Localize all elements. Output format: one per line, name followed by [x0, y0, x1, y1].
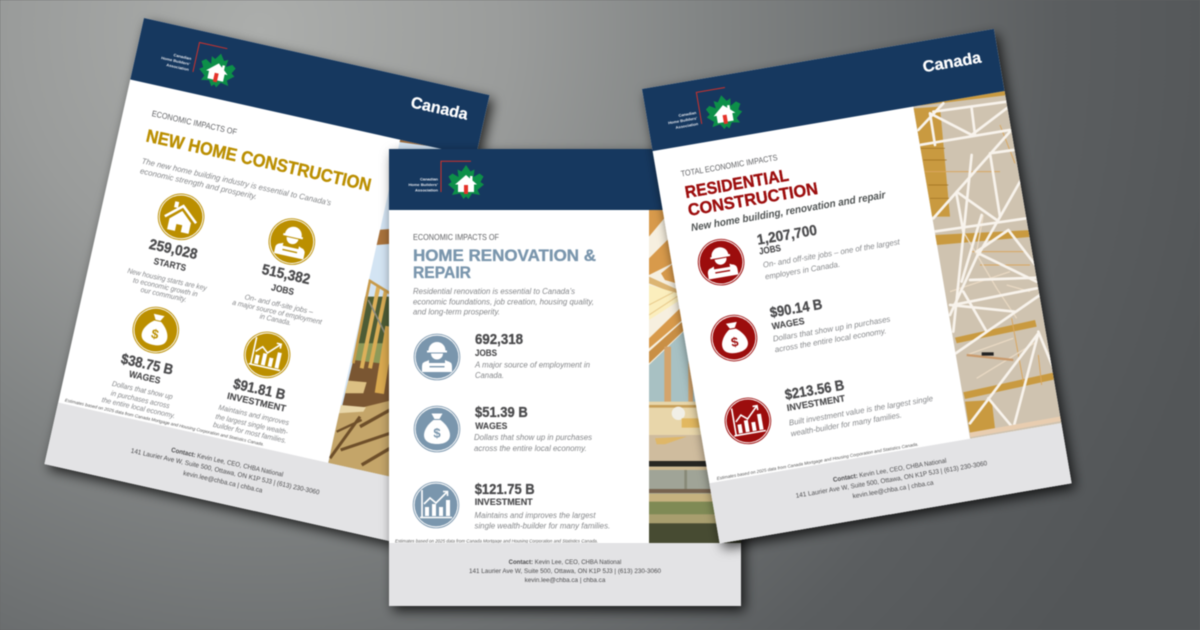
icon: chart	[722, 395, 774, 447]
icon: house	[154, 190, 208, 244]
logo: Association	[675, 122, 699, 130]
stat: starts: New housing starts are key	[127, 266, 209, 293]
stat: jobs	[695, 209, 903, 292]
heading	[680, 146, 819, 220]
photo: attic renovation	[648, 209, 742, 544]
stat: investment: Built investment value is the largest single	[788, 394, 934, 427]
logo	[158, 35, 240, 91]
icon: worker	[695, 236, 747, 288]
source note: Estimates based on 2025 data from Canada Mortgage and Housing Corporation and Statistics Canada.	[64, 398, 265, 447]
footer band	[709, 423, 1072, 543]
contact block: 141 Laurier Ave W, Suite 500, Ottawa, ON K1P 5J3 | (613) 230-3060	[795, 460, 988, 500]
stat: wages: WAGES	[475, 421, 507, 431]
stat: investment: $121.75 B	[475, 482, 535, 498]
photo: roof trusses	[913, 90, 1062, 439]
province label: Canada	[409, 94, 470, 124]
intro text: economic foundations, job creation, housing quality,	[413, 297, 594, 306]
stat: investment: $91.81 B	[232, 376, 287, 404]
source note: Estimates based on 2025 data from Canada Mortgage and Housing Corporation and Statistics Canada.	[395, 538, 598, 544]
stat: investment: INVESTMENT	[475, 497, 533, 507]
stat: wages: $90.14 B	[769, 297, 824, 322]
icon: worker	[414, 334, 460, 380]
contact block: Contact: Kevin Lee, CEO, CHBA National	[509, 559, 622, 566]
stat: investment: INVESTMENT	[786, 393, 846, 413]
contact block: kevin.lee@chba.ca | chba.ca	[852, 480, 934, 500]
stat: investment: single wealth-builder for many families.	[474, 522, 610, 530]
stat: jobs: JOBS	[758, 243, 782, 257]
panel: total residential construction flyer	[642, 10, 1184, 543]
stat: jobs: A major source of employment in	[474, 360, 591, 370]
icon: chart	[413, 482, 459, 528]
stat: investment: INVESTMENT	[226, 391, 287, 414]
stat: jobs: employers in Canada.	[764, 260, 841, 281]
heading: ECONOMIC IMPACTS OF	[413, 232, 499, 242]
icon: money bag	[414, 406, 460, 452]
stat: wages: the entire local economy.	[101, 395, 176, 420]
logo: Canadian	[420, 178, 439, 182]
contact block: Contact: Kevin Lee, CEO, CHBA National	[170, 447, 284, 479]
contact block: kevin.lee@chba.ca | chba.ca	[182, 470, 263, 495]
logo: Home Builders’	[161, 56, 190, 66]
header band	[389, 149, 741, 210]
stat: investment: Maintains and improves the largest	[474, 511, 596, 520]
photo: house framing	[328, 139, 440, 477]
logo: Association	[166, 63, 190, 72]
panel: new home construction flyer	[42, 13, 612, 580]
intro text: economic strength and prosperity.	[139, 166, 258, 201]
stat: investment: wealth-builder for many families.	[790, 410, 902, 438]
stat: starts	[123, 186, 227, 308]
heading: CONSTRUCTION	[687, 179, 819, 220]
heading: NEW HOME CONSTRUCTION	[144, 126, 373, 195]
contact block: 141 Laurier Ave W, Suite 500, Ottawa, ON K1P 5J3 | (613) 230-3060	[130, 448, 320, 497]
stat: jobs: 515,382	[260, 262, 312, 288]
stat: starts: STARTS	[153, 256, 187, 273]
icon: worker	[265, 214, 319, 269]
intro text: Residential renovation is essential to Canada’s	[413, 287, 575, 296]
stat: jobs: a major source of employment	[232, 298, 324, 327]
stat: wages	[101, 300, 197, 420]
heading: RESIDENTIAL	[683, 166, 790, 202]
logo	[664, 85, 745, 138]
stat: wages	[414, 405, 592, 453]
stat: wages: $51.39 B	[475, 405, 528, 421]
stat: investment	[413, 482, 610, 530]
icon: chart	[240, 328, 294, 382]
footer band	[389, 543, 741, 606]
stat: jobs: 692,318	[475, 332, 523, 348]
contact block: Contact: Kevin Lee, CEO, CHBA National	[833, 457, 948, 484]
logo: Canadian	[678, 111, 697, 118]
stat: investment: Maintains and improves	[218, 403, 290, 427]
stat: wages: Dollars that show up in purchases	[474, 433, 592, 442]
intro text: The new home building industry is essential to Canada’s	[141, 157, 332, 208]
stat: jobs	[414, 332, 591, 380]
heading: HOME RENOVATION &	[413, 247, 596, 265]
stat: wages: across the entire local economy.	[474, 444, 587, 453]
stat: wages: $38.75 B	[119, 351, 175, 379]
stat: jobs: 1,207,700	[756, 223, 818, 249]
icon: money bag	[708, 312, 760, 364]
stat: jobs: On- and off-site jobs –	[244, 292, 315, 316]
heading: ECONOMIC IMPACTS OF	[151, 108, 238, 137]
icon: money bag: $	[150, 326, 161, 342]
stat: starts: 259,028	[148, 237, 199, 263]
header band	[130, 18, 490, 157]
logo: Home Builders’	[408, 183, 438, 187]
intro text	[413, 287, 594, 316]
heading	[413, 232, 596, 282]
stat: jobs: Canada.	[475, 371, 504, 380]
stat: wages: across the entire local economy.	[774, 326, 887, 354]
source note: Estimates based on 2025 data from Canada Mortgage and Housing Corporation and Statistics Canada.	[716, 442, 919, 481]
panel: home renovation and repair flyer	[389, 149, 745, 606]
stat: wages: Dollars that show up in purchases	[772, 315, 891, 343]
stat: jobs: JOBS	[270, 282, 295, 297]
stat: investment	[721, 363, 936, 449]
stat: wages: WAGES	[771, 316, 805, 331]
stat: investment	[212, 325, 309, 445]
province label: Canada	[922, 50, 983, 76]
stat: wages	[707, 286, 893, 365]
header band	[642, 29, 1005, 151]
footer band	[44, 403, 404, 541]
stat: starts: to economic growth in	[132, 276, 199, 299]
logo: Home Builders’	[668, 116, 698, 125]
stat: investment: builder for most families.	[212, 420, 288, 445]
logo	[408, 161, 484, 199]
intro text: and long-term prosperity.	[413, 307, 500, 316]
stat: investment: the largest single wealth-	[215, 412, 289, 437]
stat: wages: WAGES	[128, 369, 161, 386]
stat: starts: our community.	[140, 285, 188, 304]
stat: investment: $213.56 B	[784, 378, 846, 404]
stat: jobs: in Canada.	[259, 312, 292, 327]
logo: Canadian	[173, 53, 192, 61]
contact block	[794, 451, 990, 510]
stat: jobs: On- and off-site jobs – one of the largest	[762, 237, 901, 270]
heading: TOTAL ECONOMIC IMPACTS	[680, 152, 779, 179]
contact block: 141 Laurier Ave W, Suite 500, Ottawa, ON K1P 5J3 | (613) 230-3060	[469, 568, 661, 575]
logo: Association	[415, 188, 439, 192]
subtitle: New home building, renovation and repair	[690, 189, 887, 234]
contact block: kevin.lee@chba.ca | chba.ca	[525, 577, 606, 584]
stat: wages: Dollars that show up	[111, 379, 174, 401]
contact block	[469, 559, 661, 584]
stat: jobs: JOBS	[475, 348, 497, 358]
stat: jobs	[230, 210, 343, 334]
heading: REPAIR	[413, 264, 471, 282]
icon: money bag: $	[433, 426, 441, 440]
stat: wages: in purchases across	[110, 388, 171, 410]
icon: money bag: $	[730, 334, 740, 350]
